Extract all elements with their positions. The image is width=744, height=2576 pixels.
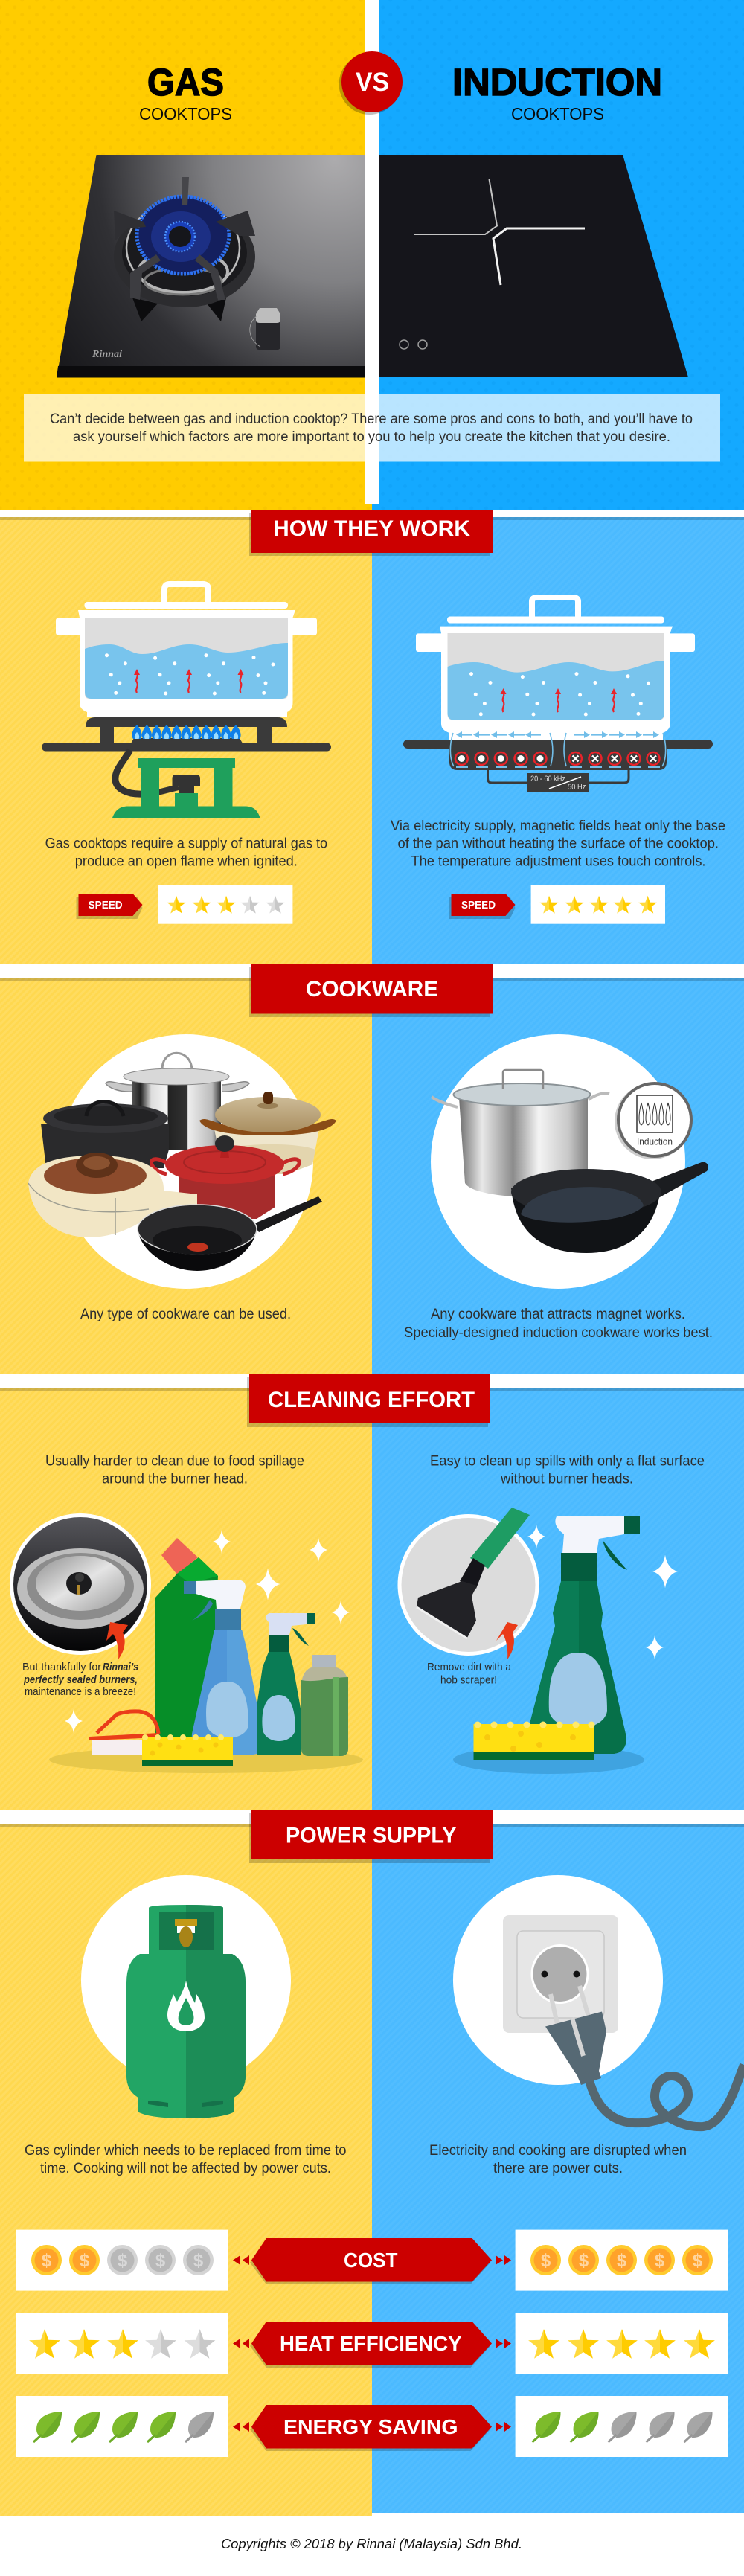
induction speed rating: SPEED bbox=[461, 899, 496, 911]
footer: copyright: Copyrights © 2018 by Rinnai (Malaysia) Sdn Bhd. bbox=[221, 2537, 522, 2551]
label: heat efficiency: HEAT EFFICIENCY bbox=[280, 2332, 462, 2355]
cookware group: steel pot, cast iron, glass, red, clay and frying pan bbox=[28, 1053, 336, 1271]
circle backdrop: electric socket bbox=[453, 1875, 663, 2085]
gas cost coins: $ bbox=[80, 2251, 90, 2271]
induction cost coins: $ bbox=[655, 2251, 665, 2271]
induction cookware: stock pot and cast iron pan bbox=[432, 1070, 708, 1253]
gas cost coins: $ bbox=[193, 2251, 204, 2271]
intro text box bbox=[24, 394, 720, 461]
caption: magnetic cookware bbox=[404, 1307, 713, 1341]
intro text box: ask yourself which factors are more important to you to help you create the kitchen that you desire. bbox=[73, 429, 670, 445]
illustration: wall socket and plug bbox=[503, 1915, 744, 2127]
induction coil cooktop illustration: 50 Hz bbox=[568, 783, 586, 792]
row: cost bbox=[16, 2230, 728, 2291]
panel: header bbox=[24, 51, 720, 461]
label: energy saving: ENERGY SAVING bbox=[283, 2415, 458, 2438]
induction explanation text: of the pan without heating the surface of the cooktop. bbox=[397, 836, 719, 852]
gas cost coins: $ bbox=[42, 2251, 52, 2271]
induction explanation text: Via electricity supply, magnetic fields heat only the base bbox=[391, 818, 725, 834]
induction cleaning text: Easy to clean up spills with only a flat surface bbox=[430, 1453, 705, 1469]
gas cost coins bbox=[16, 2230, 228, 2291]
induction explanation text: The temperature adjustment uses touch controls. bbox=[411, 853, 705, 869]
caption: electric socket bbox=[429, 2143, 687, 2176]
gas energy leaves bbox=[16, 2396, 228, 2457]
callout text: hob scraper bbox=[427, 1661, 512, 1686]
badge: vs bbox=[339, 51, 403, 115]
panel: how they work bbox=[42, 510, 725, 924]
heading: how they work: HOW THEY WORK bbox=[273, 516, 470, 541]
title: gas: COOKTOPS bbox=[139, 104, 232, 124]
gas cleaning text: around the burner head. bbox=[102, 1472, 248, 1487]
caption: magnetic cookware: Specially-designed induction cookware works best. bbox=[404, 1325, 713, 1341]
label: cost bbox=[233, 2238, 511, 2284]
row: energy saving bbox=[16, 2396, 728, 2457]
callout text: rinnai sealed burners: Rinnai’s bbox=[103, 1661, 138, 1673]
induction cost coins bbox=[516, 2230, 728, 2291]
badge: vs: VS bbox=[356, 68, 389, 97]
gas boiling pot illustration bbox=[56, 584, 317, 717]
callout text: rinnai sealed burners: maintenance is a breeze! bbox=[25, 1685, 136, 1698]
icon: induction symbol badge bbox=[615, 1083, 691, 1159]
gas cost coins: $ bbox=[155, 2251, 166, 2271]
callout text: hob scraper: Remove dirt with a bbox=[427, 1661, 512, 1673]
caption: gas cylinder: time. Cooking will not be affected by power cuts. bbox=[40, 2161, 331, 2176]
induction cost coins: $ bbox=[693, 2251, 703, 2271]
callout text: hob scraper: hob scraper! bbox=[440, 1674, 497, 1686]
icon: induction symbol badge: Induction bbox=[637, 1135, 673, 1147]
panel: cleaning effort bbox=[10, 1374, 705, 1774]
intro text box: Can’t decide between gas and induction cooktop? There are some pros and cons to both, and you’ll have to bbox=[50, 411, 693, 427]
gas cooktop photo bbox=[57, 155, 365, 378]
induction cleaning text: without burner heads. bbox=[500, 1472, 633, 1487]
gas burner and supply illustration bbox=[42, 717, 331, 818]
illustration: spray bottle and sponge bbox=[453, 1516, 678, 1774]
gas cleaning text bbox=[45, 1453, 304, 1487]
caption: electric socket: there are power cuts. bbox=[493, 2161, 623, 2176]
callout text: rinnai sealed burners bbox=[22, 1661, 138, 1698]
gas explanation text: Gas cooktops require a supply of natural gas to bbox=[45, 836, 327, 852]
callout text: rinnai sealed burners: perfectly sealed burners, bbox=[23, 1673, 138, 1686]
induction cost coins: $ bbox=[541, 2251, 551, 2271]
induction cleaning text bbox=[430, 1453, 705, 1487]
caption: electric socket: Electricity and cooking are disrupted when bbox=[429, 2143, 687, 2159]
induction explanation text bbox=[391, 818, 725, 869]
label: cost: COST bbox=[344, 2249, 397, 2272]
induction cost coins: $ bbox=[617, 2251, 627, 2271]
induction coil cooktop illustration bbox=[403, 733, 713, 792]
row: heat efficiency bbox=[16, 2313, 728, 2374]
heading: cleaning effort bbox=[247, 1374, 490, 1427]
gas explanation text bbox=[45, 836, 327, 869]
circle backdrop: any cookware bbox=[59, 1034, 313, 1289]
heading: cleaning effort: CLEANING EFFORT bbox=[268, 1388, 475, 1412]
title: gas bbox=[139, 61, 232, 124]
title: gas: GAS bbox=[147, 61, 224, 103]
circle backdrop: magnetic cookware bbox=[431, 1034, 685, 1289]
callout: sealed burner photo bbox=[10, 1513, 151, 1659]
heading: cookware: COOKWARE bbox=[306, 977, 438, 1002]
induction coil cooktop illustration: 20 - 60 kHz bbox=[530, 775, 565, 784]
label: heat efficiency bbox=[233, 2322, 511, 2368]
illustration: cleaning products group bbox=[49, 1530, 363, 1773]
title: induction: INDUCTION bbox=[452, 61, 662, 103]
caption: any cookware: Any type of cookware can be used. bbox=[80, 1307, 291, 1322]
gas cost coins: $ bbox=[118, 2251, 128, 2271]
circle backdrop: gas cylinder bbox=[81, 1875, 291, 2085]
induction speed rating bbox=[449, 885, 665, 924]
induction boiling pot illustration bbox=[416, 597, 695, 740]
induction heat stars bbox=[516, 2313, 728, 2374]
illustration: gas cylinder bbox=[126, 1905, 246, 2118]
heading: power supply: POWER SUPPLY bbox=[286, 1823, 457, 1848]
title: induction bbox=[452, 61, 662, 124]
label: energy saving bbox=[233, 2405, 511, 2451]
caption: gas cylinder bbox=[25, 2143, 347, 2176]
title: induction: COOKTOPS bbox=[511, 104, 604, 124]
caption: magnetic cookware: Any cookware that attracts magnet works. bbox=[431, 1307, 685, 1322]
panel: comparison ratings bbox=[16, 2230, 728, 2457]
gas explanation text: produce an open flame when ignited. bbox=[75, 853, 298, 869]
gas heat stars bbox=[16, 2313, 228, 2374]
heading: how they work bbox=[249, 510, 493, 556]
callout text: rinnai sealed burners: But thankfully for bbox=[22, 1661, 101, 1673]
induction cooktop photo bbox=[379, 155, 688, 377]
caption: gas cylinder: Gas cylinder which needs to be replaced from time to bbox=[25, 2143, 347, 2159]
gas cleaning text: Usually harder to clean due to food spillage bbox=[45, 1453, 304, 1469]
induction energy leaves bbox=[516, 2396, 728, 2457]
heading: cookware bbox=[249, 964, 493, 1017]
heading: power supply bbox=[249, 1810, 493, 1863]
gas speed rating bbox=[76, 885, 292, 924]
induction cost coins: $ bbox=[579, 2251, 589, 2271]
panel: cookware bbox=[28, 964, 713, 1341]
panel: power supply bbox=[25, 1810, 744, 2176]
gas cooktop photo: Rinnai bbox=[92, 349, 122, 360]
gas speed rating: SPEED bbox=[89, 899, 123, 911]
callout: hob scraper bbox=[397, 1508, 539, 1659]
